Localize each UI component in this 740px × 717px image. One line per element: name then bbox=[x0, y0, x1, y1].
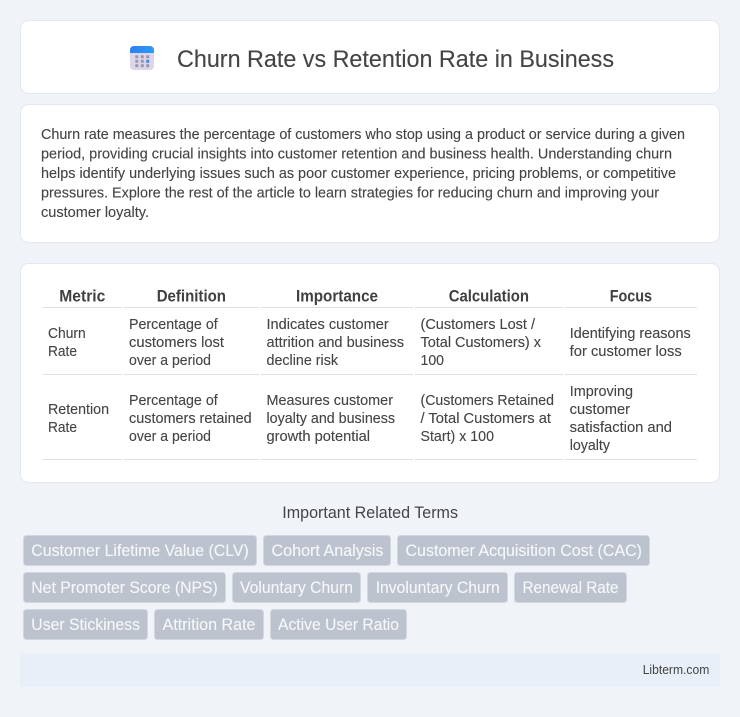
table row: churn rate: for customer loss bbox=[570, 344, 682, 360]
tag: user stickiness: User Stickiness bbox=[31, 616, 140, 634]
table row: retention rate: satisfaction and bbox=[570, 420, 672, 436]
table row: retention rate: loyalty and business bbox=[266, 411, 395, 427]
tag: voluntary churn: Voluntary Churn bbox=[240, 579, 353, 597]
text block: introduction paragraph: customer loyalty. bbox=[41, 205, 149, 221]
tag: involuntary churn: Involuntary Churn bbox=[376, 579, 500, 597]
table header row: Importance bbox=[296, 288, 378, 306]
table header row: Focus bbox=[610, 288, 652, 306]
tag: customer lifetime value: Customer Lifetime Value (CLV) bbox=[31, 542, 249, 560]
text block: introduction paragraph: Churn rate measures the percentage of customers who stop using a product or service during a given bbox=[41, 127, 685, 143]
tag: active user ratio: Active User Ratio bbox=[278, 616, 399, 634]
table row: churn rate: Identifying reasons bbox=[570, 326, 691, 342]
table row: churn rate bbox=[43, 317, 697, 375]
heading: important related terms: Important Related Terms bbox=[282, 504, 458, 522]
tag: renewal rate bbox=[514, 572, 626, 602]
text block: introduction paragraph: helps identify underlying issues such as poor customer experience, pricing problems, or competitive bbox=[41, 166, 676, 182]
table row: churn rate: 100 bbox=[420, 353, 444, 369]
table header row: Metric bbox=[59, 288, 105, 306]
table row: retention rate: (Customers Retained bbox=[420, 393, 554, 409]
table row: churn rate: Percentage of bbox=[129, 317, 219, 333]
text block: introduction paragraph bbox=[41, 127, 685, 221]
footer bbox=[20, 653, 720, 687]
table row: retention rate: over a period bbox=[129, 429, 211, 445]
title: Churn Rate vs Retention Rate in Business bbox=[177, 46, 614, 73]
table row: churn rate: (Customers Lost / bbox=[420, 317, 536, 333]
tag: involuntary churn bbox=[368, 572, 508, 602]
tag: customer acquisition cost: Customer Acquisition Cost (CAC) bbox=[406, 542, 642, 560]
table row: churn rate: Total Customers) x bbox=[420, 335, 542, 351]
tag list: related terms bbox=[24, 536, 650, 640]
tag: voluntary churn bbox=[232, 572, 360, 602]
table row: churn rate: Indicates customer bbox=[266, 317, 389, 333]
tag: net promoter score bbox=[24, 572, 226, 602]
table header row bbox=[43, 288, 697, 308]
table row: retention rate: Percentage of bbox=[129, 393, 219, 409]
table row: retention rate: Rate bbox=[48, 420, 77, 436]
tag: cohort analysis: Cohort Analysis bbox=[272, 542, 384, 560]
tag: customer lifetime value bbox=[24, 536, 256, 566]
text block: introduction paragraph: pressures. Explore the rest of the article to learn strategies for reducing churn and improving your bbox=[41, 186, 659, 202]
table row: retention rate: growth potential bbox=[266, 429, 370, 445]
tag: renewal rate: Renewal Rate bbox=[522, 579, 618, 597]
text block: introduction paragraph: period, providing crucial insights into customer retention and business health. Understanding churn bbox=[41, 146, 672, 162]
table row: churn rate: over a period bbox=[129, 353, 211, 369]
table row: retention rate: customer bbox=[570, 402, 630, 418]
tag: customer acquisition cost bbox=[398, 536, 650, 566]
tag: user stickiness bbox=[24, 610, 148, 640]
table row: churn rate: Rate bbox=[48, 344, 77, 360]
table row: churn rate: attrition and business bbox=[266, 335, 404, 351]
panel: comparison table bbox=[20, 264, 720, 482]
footer brand: Libterm.com bbox=[643, 663, 709, 677]
tag: active user ratio bbox=[270, 610, 406, 640]
table row: retention rate: / Total Customers at bbox=[420, 411, 551, 427]
table row: retention rate: Start) x 100 bbox=[420, 429, 494, 445]
table row: retention rate: customers retained bbox=[129, 411, 252, 427]
tag: attrition rate bbox=[154, 610, 264, 640]
table row: retention rate: loyalty bbox=[570, 438, 611, 454]
tag: cohort analysis bbox=[264, 536, 390, 566]
tag: net promoter score: Net Promoter Score (NPS) bbox=[31, 579, 218, 597]
table row: retention rate: Measures customer bbox=[266, 393, 393, 409]
table header row: Definition bbox=[157, 288, 226, 306]
table row: retention rate: Improving bbox=[570, 384, 633, 400]
table row: retention rate: Retention bbox=[48, 402, 109, 418]
table row: churn rate: decline risk bbox=[266, 353, 339, 369]
table row: churn rate: Churn bbox=[48, 326, 86, 342]
table row: churn rate: customers lost bbox=[129, 335, 224, 351]
table header row: Calculation bbox=[449, 288, 529, 306]
icon: calendar bbox=[130, 46, 154, 70]
panel: header bbox=[20, 20, 720, 94]
table row: retention rate bbox=[43, 384, 697, 460]
tag: attrition rate: Attrition Rate bbox=[162, 616, 256, 634]
panel: introduction bbox=[20, 104, 720, 242]
